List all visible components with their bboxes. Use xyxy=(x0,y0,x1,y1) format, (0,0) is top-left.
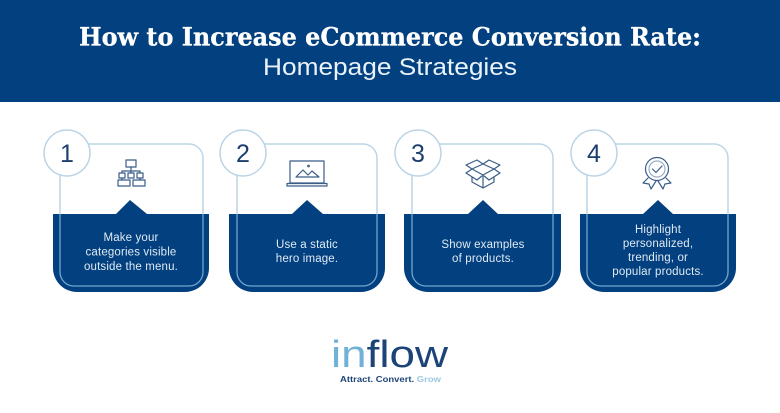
panel: step 2 xyxy=(220,130,385,292)
number badge 1 xyxy=(44,130,90,176)
number badge 4 xyxy=(571,130,617,176)
step 2 text xyxy=(276,239,338,265)
step 3 text xyxy=(441,239,525,265)
number badge 3: 3 xyxy=(411,140,425,168)
number badge 2: 2 xyxy=(236,140,250,168)
panel: step 4 xyxy=(571,130,736,292)
logo tagline: Attract. Convert. Grow xyxy=(340,374,441,384)
panel: step 1 xyxy=(44,130,209,292)
step 1 text: categories visible xyxy=(86,246,176,258)
icon: open box xyxy=(466,160,500,188)
number badge 1: 1 xyxy=(60,140,74,168)
step 1 text xyxy=(84,232,178,273)
subtitle: Homepage Strategies xyxy=(263,54,517,81)
step 2 text: hero image. xyxy=(276,253,338,265)
title: How to Increase eCommerce Conversion Rate: xyxy=(79,22,701,52)
step 4 text xyxy=(612,224,704,278)
step 3 text: of products. xyxy=(452,253,514,265)
number badge 4: 4 xyxy=(587,140,601,168)
step 1 text: outside the menu. xyxy=(84,261,178,273)
panel: step 3 xyxy=(395,130,561,292)
header banner xyxy=(0,0,780,102)
step 4 text: popular products. xyxy=(612,266,704,278)
step 1 text: Make your xyxy=(103,232,159,244)
step 3 text: Show examples xyxy=(441,239,525,251)
icon: laptop with image xyxy=(287,161,327,186)
icon: sitemap xyxy=(118,160,145,186)
logo: inflow: inflow xyxy=(331,334,449,376)
step 2 text: Use a static xyxy=(276,239,338,251)
icon: award ribbon xyxy=(643,158,671,189)
step 4 text: Highlight xyxy=(635,224,682,236)
step 4 text: trending, or xyxy=(628,252,688,264)
number badge 2 xyxy=(220,130,266,176)
number badge 3 xyxy=(395,130,441,176)
step 4 text: personalized, xyxy=(623,238,693,250)
